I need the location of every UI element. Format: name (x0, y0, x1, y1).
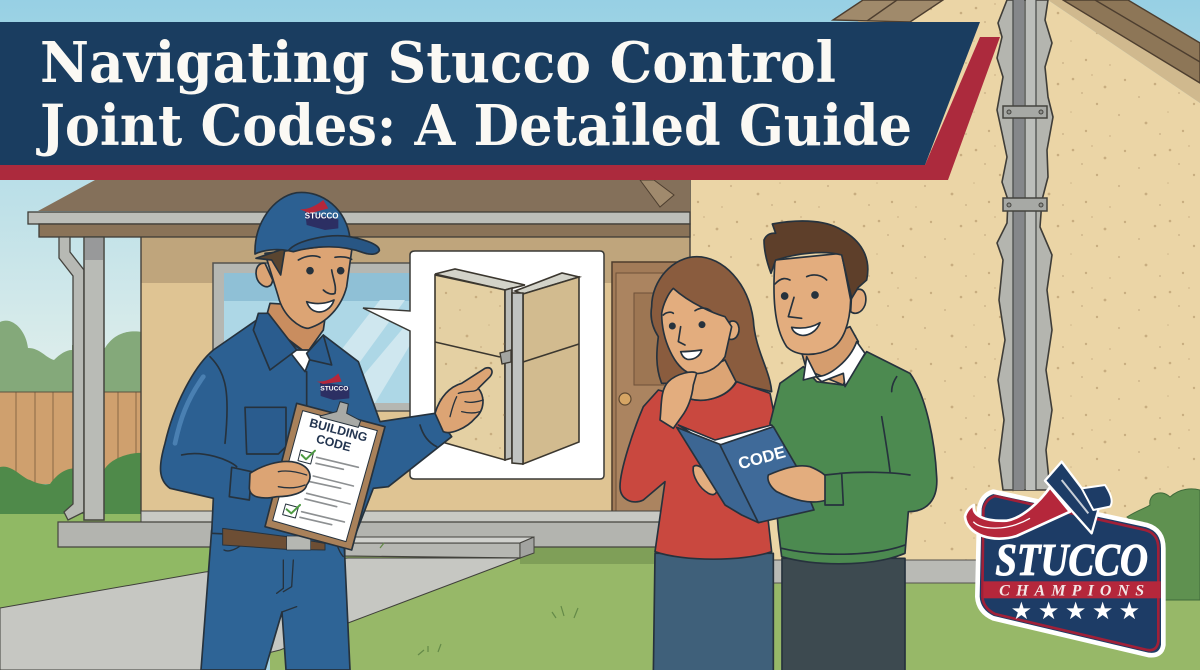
hedge (0, 453, 142, 514)
man cuff (825, 473, 843, 505)
inspector figure (160, 192, 492, 670)
driveway path (0, 558, 520, 670)
man eyes and smile (775, 275, 827, 335)
logo stars: ★ (1038, 597, 1059, 625)
eyes and brows (298, 256, 352, 294)
badge inner border (982, 496, 1158, 650)
logo badge (965, 462, 1163, 655)
man trousers (782, 558, 905, 670)
woman hand (660, 372, 697, 428)
clipboard heading: CODE (315, 432, 353, 454)
stucco panel left (435, 269, 525, 460)
holding hand fingers (278, 471, 307, 488)
swoosh highlight (973, 518, 1030, 528)
clipboard clip (320, 402, 361, 427)
woman jeans (653, 553, 773, 670)
chest logo (317, 373, 349, 400)
man sweater (770, 352, 937, 564)
slab shadow (520, 547, 665, 564)
shirt cuff (229, 467, 252, 500)
trouser details (224, 543, 343, 612)
front roof (28, 180, 690, 237)
sleeve highlight (175, 377, 203, 443)
porch post (84, 237, 104, 520)
clipboard (265, 402, 385, 550)
sweater details (782, 377, 910, 554)
right bush (1127, 489, 1200, 600)
badge shape (977, 492, 1163, 655)
metal joint strip (505, 288, 523, 464)
background trees (0, 321, 142, 400)
cap logo: STUCCO (305, 212, 339, 221)
chest pocket (245, 407, 286, 454)
belt buckle (287, 536, 311, 550)
logo stars: ★ (1092, 597, 1113, 625)
smile (307, 300, 334, 312)
open book (677, 425, 814, 523)
window (213, 263, 418, 411)
lawn centre and right (270, 546, 1200, 670)
banner navy field (0, 22, 980, 165)
man face (774, 253, 851, 354)
belt (223, 528, 325, 550)
callout: control joint diagram (363, 251, 604, 479)
shirt collar (803, 342, 865, 387)
woman eyes and mouth (663, 308, 712, 359)
upper roof edge left (833, 0, 943, 22)
woman top (620, 382, 773, 559)
undershirt (288, 350, 313, 372)
man hair (764, 221, 868, 298)
sleeve crease (182, 357, 437, 467)
title line 2: Joint Codes: A Detailed Guide (35, 93, 912, 159)
woman hair (651, 257, 772, 392)
logo subtitle: CHAMPIONS (999, 582, 1144, 599)
cap (255, 192, 350, 254)
clipboard lines (300, 457, 358, 525)
man ear (851, 289, 866, 313)
grass tufts (380, 543, 578, 655)
logo stars: ★ (1011, 597, 1032, 625)
downspout (59, 237, 84, 520)
lawn left (0, 514, 240, 624)
woman face (662, 288, 732, 374)
upper roof edge right (1048, 0, 1200, 103)
book label: CODE (736, 442, 788, 473)
cap visor (288, 236, 379, 254)
red band (983, 581, 1161, 598)
trowel (1045, 462, 1112, 533)
woman neck (688, 360, 736, 400)
pointing hand (435, 368, 492, 433)
clipboard heading (304, 416, 369, 458)
collar (253, 313, 332, 370)
wooden fence (0, 392, 142, 484)
man neck (800, 327, 858, 385)
title banner (0, 22, 1000, 180)
front house wall (141, 180, 690, 514)
woman lower hand (693, 465, 717, 495)
head (265, 243, 353, 328)
main stucco wall (690, 0, 1200, 570)
hair (256, 248, 285, 275)
control joint (997, 0, 1053, 490)
trousers (201, 530, 350, 670)
clipboard checkboxes (283, 450, 315, 518)
title line 1: Navigating Stucco Control (40, 30, 836, 96)
banner red stripe (0, 37, 1000, 180)
porch slab (58, 511, 661, 558)
man hand (768, 466, 828, 502)
speech bubble (363, 251, 604, 479)
clipboard heading: BUILDING (308, 416, 369, 445)
logo stars (1011, 597, 1140, 625)
foundation strip (660, 560, 980, 583)
logo wordmark: STUCCO (995, 535, 1148, 585)
logo stars: ★ (1065, 597, 1086, 625)
shirt placket (304, 372, 309, 407)
sky (0, 0, 1200, 360)
red swoosh (965, 487, 1070, 539)
couple figures (620, 221, 937, 670)
stucco panel right (515, 273, 579, 464)
neck (265, 303, 327, 353)
joint clip (500, 350, 511, 364)
logo stars: ★ (1119, 597, 1140, 625)
door (612, 262, 690, 514)
ear (256, 263, 273, 287)
holding hand (249, 461, 310, 498)
cap logo (300, 200, 339, 230)
shirt torso and arm (160, 320, 452, 540)
woman ear (727, 321, 739, 339)
chest logo: STUCCO (320, 386, 348, 393)
finger lines (450, 388, 483, 417)
